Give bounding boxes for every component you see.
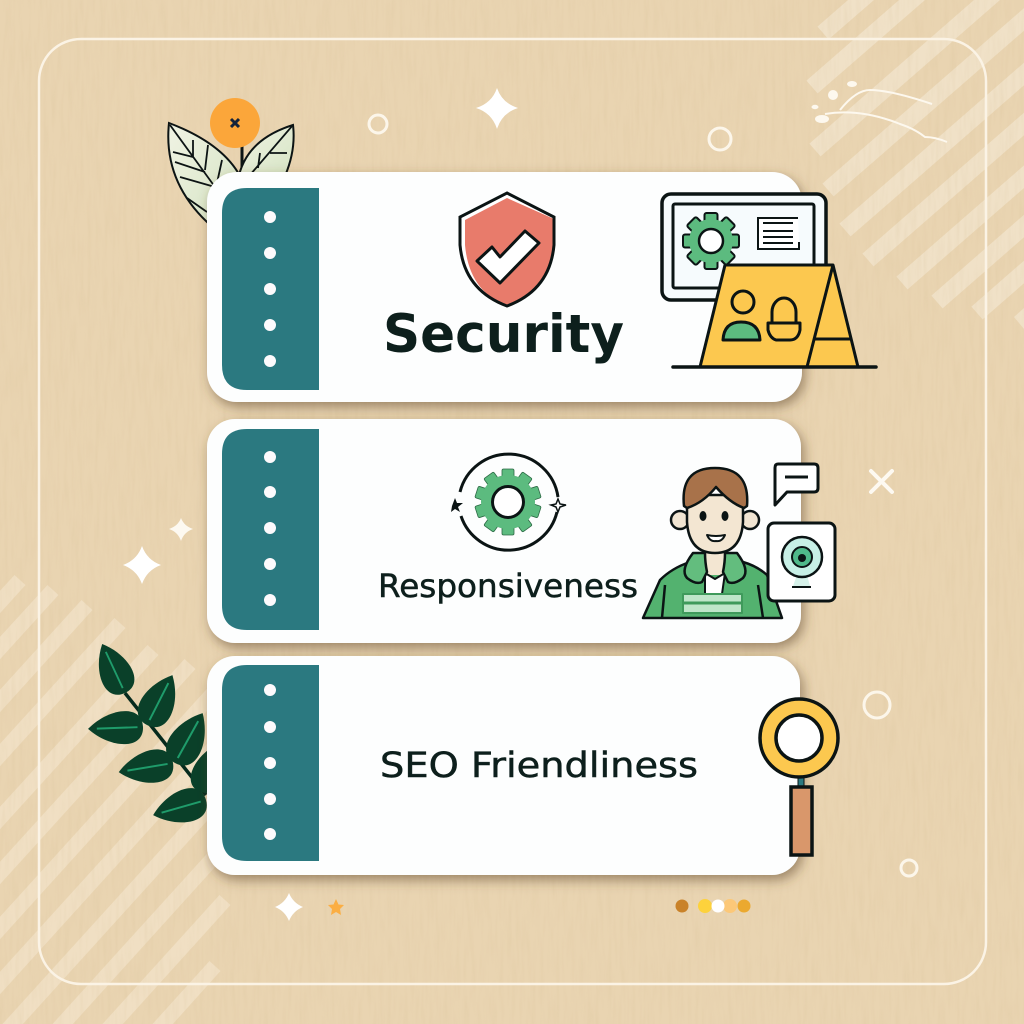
sparkle: bottom bbox=[275, 893, 303, 921]
heading: security: Security bbox=[383, 304, 624, 365]
leafy branch bbox=[87, 637, 231, 831]
ring: bottom right bbox=[901, 860, 917, 876]
teal tab: seo friendliness bbox=[222, 665, 319, 861]
ring: right bbox=[864, 692, 890, 718]
icon: monitor and sign board bbox=[662, 194, 876, 367]
ring: top right bbox=[709, 128, 731, 150]
card background: security bbox=[207, 172, 802, 402]
background stripes: bottom left bbox=[0, 575, 230, 1024]
heading: responsiveness: Responsiveness bbox=[378, 567, 638, 605]
sparkle: left small bbox=[169, 518, 193, 541]
ring: top left bbox=[369, 115, 387, 133]
heading: seo friendliness: SEO Friendliness bbox=[380, 746, 698, 786]
icon: support person bbox=[643, 468, 782, 618]
background stripes: top right bbox=[806, 0, 1024, 329]
panel: responsiveness bbox=[207, 419, 835, 643]
icon: gear in ring bbox=[451, 454, 566, 550]
tab dots: responsiveness bbox=[264, 451, 276, 606]
top-right white swooshes bbox=[812, 81, 947, 142]
icon: app card bbox=[768, 523, 835, 601]
cross: right bbox=[871, 471, 892, 492]
sparkle: left large bbox=[123, 546, 161, 584]
panel: seo friendliness bbox=[207, 656, 838, 875]
panel: security bbox=[207, 172, 876, 402]
tab dots: seo friendliness bbox=[264, 684, 276, 840]
icon: shield with check bbox=[460, 193, 554, 306]
teal tab: responsiveness bbox=[222, 429, 319, 630]
card background: seo friendliness bbox=[207, 656, 800, 875]
dots: bottom right bbox=[676, 899, 750, 913]
card background: responsiveness bbox=[207, 419, 801, 643]
sparkle: top centre bbox=[476, 88, 518, 129]
tab dots: security bbox=[264, 211, 276, 367]
teal tab: security bbox=[222, 188, 319, 390]
icon: magnifying glass bbox=[760, 699, 838, 855]
flower and pale leaves bbox=[168, 98, 294, 222]
star: orange bbox=[328, 899, 344, 915]
icon: chat bubble bbox=[775, 464, 818, 505]
